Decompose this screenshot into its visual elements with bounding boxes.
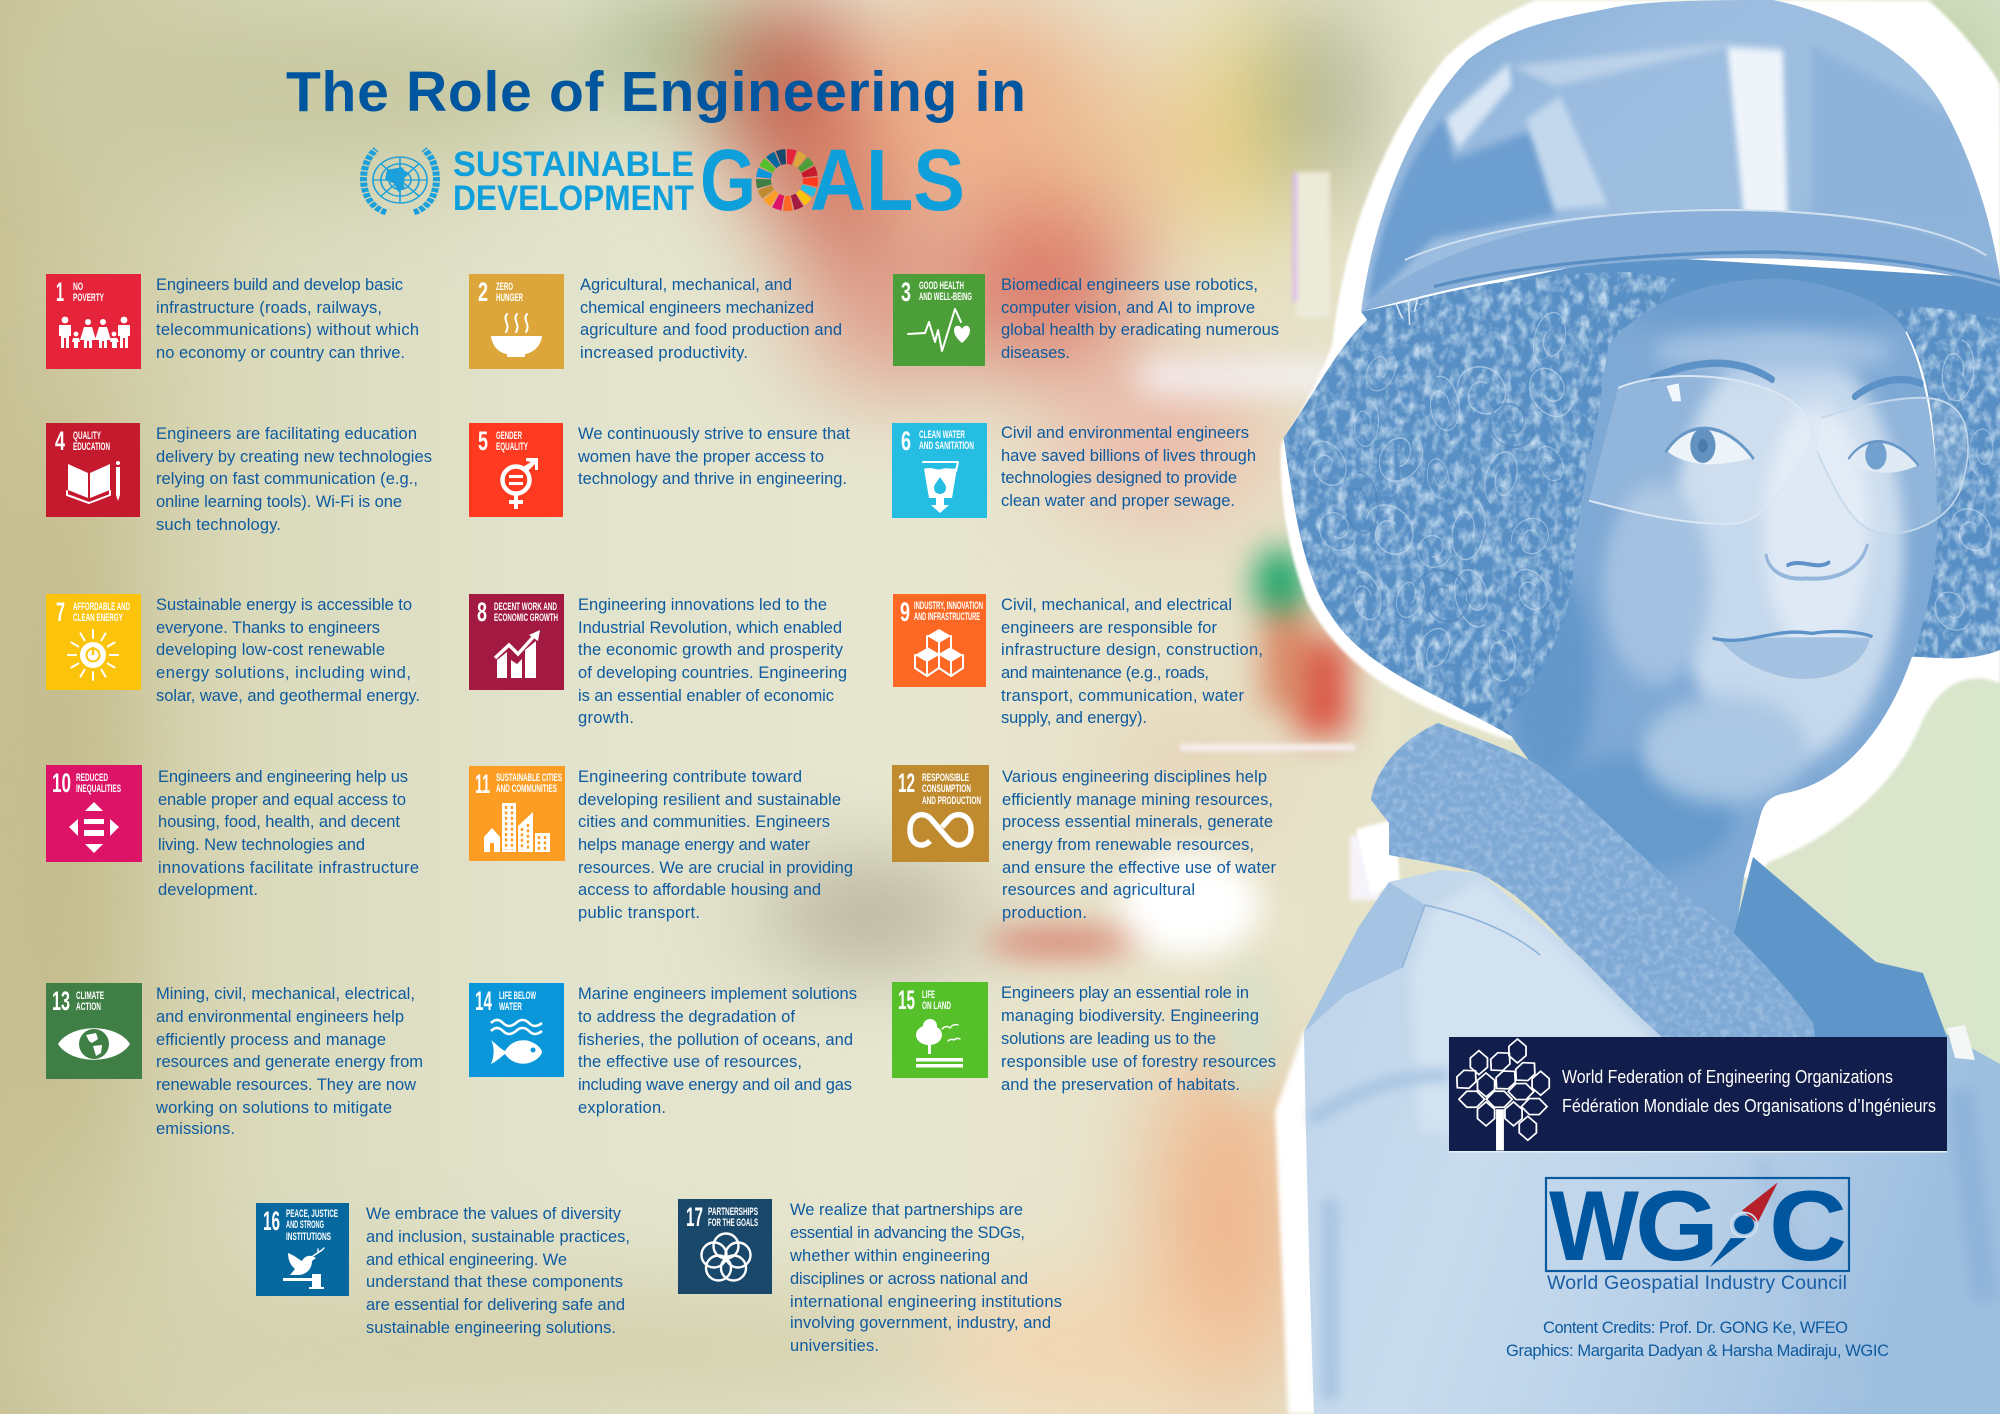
panel: goal 4 quality education [46, 423, 432, 534]
tile 6 [892, 423, 987, 518]
text 13 [155, 985, 423, 1138]
text 5: We continuously strive to ensure that [578, 425, 850, 443]
text 15 [1001, 984, 1276, 1094]
icon: waves and fish [491, 1020, 542, 1064]
text 15: Engineers play an essential role in [1001, 984, 1249, 1002]
text 11: public transport. [578, 904, 700, 922]
tile 11: SUSTAINABLE CITIES [496, 772, 562, 784]
text 11: developing resilient and sustainable [578, 791, 841, 809]
text 15: and the preservation of habitats. [1001, 1076, 1240, 1094]
text 4 [156, 425, 432, 534]
WGIC full name: World Geospatial Industry Council [1547, 1272, 1847, 1294]
shadow band under brim [1361, 255, 2000, 345]
wordmark letters: G [1635, 1170, 1719, 1281]
text 7: solar, wave, and geothermal energy. [156, 687, 420, 705]
text 11 [578, 768, 853, 922]
tile 17: PARTNERSHIPS [708, 1206, 758, 1218]
text 6: technologies designed to provide [1001, 469, 1237, 487]
text 11: cities and communities. Engineers [578, 813, 830, 831]
tile 12: CONSUMPTION [922, 783, 971, 795]
text 17: international engineering institutions [790, 1293, 1062, 1311]
icon: compass needle [1710, 1183, 1778, 1267]
tile 14 [469, 983, 564, 1077]
text 9: and maintenance (e.g., roads, [1001, 664, 1209, 682]
icon: UN emblem [364, 149, 436, 212]
wordmark letters: C [1769, 1170, 1847, 1281]
text 10: innovations facilitate infrastructure [158, 859, 419, 877]
text 8: the economic growth and prosperity [578, 641, 844, 659]
logo: WFEO [1449, 1037, 1947, 1152]
text 7 [156, 596, 420, 705]
text 16: sustainable engineering solutions. [366, 1319, 616, 1337]
panel: goal 6 clean water [892, 423, 1256, 518]
text 17: universities. [790, 1337, 879, 1355]
tile 14: LIFE BELOW [499, 990, 536, 1002]
tile 8: ECONOMIC GROWTH [494, 612, 558, 624]
text 5 [577, 425, 850, 488]
right collar [1733, 857, 1947, 1037]
tile 5 [469, 423, 563, 517]
face and neck [1502, 278, 1937, 933]
tile 13: 13 [52, 986, 70, 1016]
tile 1: 1 [56, 277, 64, 307]
icon: open book and pencil [67, 461, 120, 503]
panel: goal 17 partnerships [678, 1199, 1062, 1355]
tile 4: EDUCATION [73, 441, 110, 453]
icon: pulse and heart [908, 309, 970, 351]
text 9 [1001, 596, 1263, 727]
text 2: Agricultural, mechanical, and [580, 276, 792, 294]
tile 14: 14 [475, 986, 492, 1016]
text 1 [156, 276, 419, 362]
text 6: clean water and proper sewage. [1001, 492, 1235, 510]
text 12 [1002, 768, 1276, 922]
tile 10: INEQUALITIES [76, 783, 121, 795]
tile 7: 7 [56, 597, 65, 627]
tile 7 [46, 594, 141, 690]
text 9: infrastructure design, construction, [1001, 641, 1263, 659]
text 2: agriculture and food production and [580, 321, 842, 339]
text 13: and environmental engineers help [156, 1008, 404, 1026]
tile 9: 9 [900, 597, 910, 627]
text 11: access to affordable housing and [578, 881, 821, 899]
panel: goal 5 gender equality [469, 423, 850, 517]
text 1: no economy or country can thrive. [156, 344, 405, 362]
tile 16 [256, 1203, 349, 1296]
tile 3: GOOD HEALTH [919, 280, 964, 292]
text 4: delivery by creating new technologies [156, 448, 432, 466]
text 8: Engineering innovations led to the [578, 596, 827, 614]
text 12: Various engineering disciplines help [1002, 768, 1267, 786]
eyebrows, eyes, glasses, nose, mouth [1589, 363, 1968, 679]
tile 17: FOR THE GOALS [708, 1217, 758, 1229]
text 11: Engineering contribute toward [578, 768, 802, 786]
tile 4: 4 [55, 426, 65, 456]
text 16 [366, 1205, 630, 1337]
photo: engineer in hard hat [1275, 0, 2000, 1414]
text 11: resources. We are crucial in providing [578, 859, 853, 877]
tile 11: 11 [475, 769, 490, 799]
tile 11: AND COMMUNITIES [496, 783, 557, 795]
tile 14: WATER [499, 1001, 522, 1013]
tile 10: 10 [52, 768, 71, 798]
text 13: working on solutions to mitigate [155, 1099, 392, 1117]
text 7: Sustainable energy is accessible to [156, 596, 412, 614]
text 13: resources and generate energy from [156, 1053, 423, 1071]
tile 12: AND PRODUCTION [922, 795, 981, 807]
title: The Role of Engineering in [286, 60, 1026, 124]
tile 1: POVERTY [73, 292, 104, 304]
text 7: energy solutions, including wind, [156, 664, 411, 682]
tile 3: 3 [901, 277, 911, 307]
text 3: computer vision, and AI to improve [1001, 299, 1255, 317]
tile 11 [469, 766, 565, 861]
tile 9: AND INFRASTRUCTURE [914, 611, 980, 623]
text 8: is an essential enabler of economic [578, 687, 834, 705]
text 9: engineers are responsible for [1001, 619, 1218, 637]
text 10: living. New technologies and [158, 836, 365, 854]
text 6: Civil and environmental engineers [1001, 424, 1249, 442]
text 9: transport, communication, water [1001, 687, 1244, 705]
text 13: Mining, civil, mechanical, electrical, [156, 985, 415, 1003]
panel: goal 3 good health [893, 274, 1279, 366]
tile 3: AND WELL-BEING [919, 291, 972, 303]
text 12: process essential minerals, generate [1002, 813, 1273, 831]
text 10 [158, 768, 419, 899]
text 8: growth. [578, 709, 634, 727]
text 13: emissions. [156, 1120, 235, 1138]
tile 6: CLEAN WATER [919, 429, 965, 441]
tile 16: PEACE, JUSTICE [286, 1208, 338, 1220]
tile 1 [46, 274, 141, 369]
text 12: production. [1002, 904, 1087, 922]
icon: growth chart [495, 630, 540, 678]
WFEO name: Fédération Mondiale des Organisations d’Ingénieurs [1562, 1095, 1936, 1116]
text 14: fisheries, the pollution of oceans, and [578, 1031, 853, 1049]
text 3: Biomedical engineers use robotics, [1001, 276, 1258, 294]
icon: bowl [491, 314, 542, 357]
icon: WFEO tree [1451, 1039, 1549, 1151]
tile 6: AND SANITATION [919, 440, 974, 452]
tile 8: 8 [477, 597, 487, 627]
text 10: Engineers and engineering help us [158, 768, 408, 786]
icon: five rings [702, 1234, 750, 1280]
wordmark letters [1549, 1170, 1847, 1281]
text 12: efficiently manage mining resources, [1002, 791, 1273, 809]
tile 2 [469, 274, 564, 369]
icon: gender symbol [502, 458, 538, 509]
tile 7: AFFORDABLE AND [73, 601, 130, 613]
text 3 [1001, 276, 1279, 362]
wordmark: sustainable development: SUSTAINABLE [453, 145, 694, 184]
icon: dove and gavel [283, 1248, 324, 1289]
text 17: We realize that partnerships are [790, 1201, 1023, 1219]
wordmark: sustainable development [453, 145, 694, 218]
text 2 [580, 276, 842, 362]
tile 12: 12 [898, 768, 915, 798]
logo: Sustainable Development Goals [364, 132, 965, 229]
wordmark: sustainable development: DEVELOPMENT [453, 179, 694, 218]
wordmark letters: W [1549, 1170, 1640, 1281]
credits: Graphics: Margarita Dadyan & Harsha Madiraju, WGIC [1506, 1342, 1889, 1360]
tile 2: ZERO [496, 281, 513, 293]
text 16: are essential for delivering safe and [366, 1296, 625, 1314]
tile 10: REDUCED [76, 772, 108, 784]
panel: goal 7 clean energy [46, 594, 420, 705]
tile 16: 16 [263, 1206, 280, 1236]
text 12: and ensure the effective use of water [1002, 859, 1276, 877]
text 13: renewable resources. They are now [156, 1076, 416, 1094]
hair [1284, 244, 2000, 736]
text 6: have saved billions of lives through [1001, 447, 1256, 465]
text 16: We embrace the values of diversity [366, 1205, 622, 1223]
text 16: understand that these components [366, 1273, 623, 1291]
text 13: efficiently process and manage [156, 1031, 386, 1049]
tile 15 [892, 982, 988, 1078]
text 12: resources and agricultural [1002, 881, 1195, 899]
panel: goal 14 life below water [469, 983, 857, 1117]
tile 13 [46, 983, 142, 1079]
icon: arrows and equals [69, 802, 119, 853]
icon: SDG colour wheel [754, 147, 820, 213]
text 17 [789, 1201, 1062, 1355]
icon: sun [68, 630, 118, 680]
icon: eye with globe [58, 1028, 130, 1060]
icon: city [484, 803, 550, 852]
panel: goal 11 sustainable cities [469, 766, 853, 922]
tile 17 [678, 1199, 772, 1294]
panel: goal 9 industry [893, 594, 1263, 727]
text 16: and inclusion, sustainable practices, [366, 1228, 630, 1246]
wordmark: ALS: ALS [810, 132, 965, 229]
text 6 [1001, 424, 1256, 510]
tile 13: CLIMATE [76, 990, 104, 1002]
text 14 [578, 985, 857, 1117]
tile 8: DECENT WORK AND [494, 601, 557, 613]
text 10: enable proper and equal access to [158, 791, 406, 809]
text 8 [578, 596, 847, 727]
tile 9: INDUSTRY, INNOVATION [914, 600, 983, 612]
text 7: everyone. Thanks to engineers [156, 619, 380, 637]
text 4: relying on fast communication (e.g., [156, 470, 418, 488]
jacket [1275, 870, 2000, 1414]
text 14: Marine engineers implement solutions [578, 985, 857, 1003]
text 15: solutions are leading us to the [1001, 1030, 1216, 1048]
text 11: helps manage energy and water [578, 836, 810, 854]
text 17: disciplines or across national and [790, 1270, 1028, 1288]
text 1: Engineers build and develop basic [156, 276, 403, 294]
text 1: infrastructure (roads, railways, [156, 299, 382, 317]
text 17: involving government, industry, and [790, 1314, 1051, 1332]
text 14: exploration. [578, 1099, 666, 1117]
text 9: Civil, mechanical, and electrical [1001, 596, 1232, 614]
wordmark: G: G [700, 132, 756, 229]
fleece collar [1371, 723, 1815, 1037]
panel: goal 15 life on land [892, 982, 1276, 1094]
text 14: the effective use of resources, [578, 1053, 802, 1071]
icon: infinity loop [910, 815, 971, 845]
text 8: Industrial Revolution, which enabled [578, 619, 842, 637]
icon: cubes [915, 629, 963, 676]
text 10: housing, food, health, and decent [158, 813, 400, 831]
tile 15: LIFE [922, 989, 935, 1001]
panel: goal 16 peace justice [256, 1203, 630, 1337]
tile 4 [46, 423, 140, 517]
logo: WGIC [1546, 1170, 1849, 1294]
tile 3 [893, 274, 985, 366]
icon: water glass [923, 462, 958, 513]
text 5: women have the proper access to [577, 448, 824, 466]
text 4: such technology. [156, 516, 281, 534]
text 14: including wave energy and oil and gas [578, 1076, 852, 1094]
text 16: and ethical engineering. We [366, 1251, 567, 1269]
white halo around the figure [1281, 0, 2000, 895]
tile 15: ON LAND [922, 1000, 951, 1012]
text 2: chemical engineers mechanized [580, 299, 814, 317]
tile 6: 6 [901, 426, 911, 456]
tile 5: EQUALITY [496, 441, 528, 453]
tile 7: CLEAN ENERGY [73, 612, 123, 624]
tile 8 [469, 594, 564, 690]
text 5: technology and thrive in engineering. [578, 470, 847, 488]
text 3: global health by eradicating numerous [1001, 321, 1279, 339]
tile 5: GENDER [496, 430, 522, 442]
tile 5: 5 [478, 426, 488, 456]
text 2: increased productivity. [580, 344, 748, 362]
credits [1506, 1319, 1889, 1360]
text 17: essential in advancing the SDGs, [790, 1224, 1025, 1242]
text 1: telecommunications) without which [156, 321, 419, 339]
tile 2: HUNGER [496, 292, 523, 304]
WFEO name: World Federation of Engineering Organizations [1562, 1066, 1893, 1087]
hat [1356, 0, 2000, 318]
tile 12: RESPONSIBLE [922, 772, 969, 784]
text 4: online learning tools). Wi-Fi is one [156, 493, 402, 511]
text 14: to address the degradation of [578, 1008, 795, 1026]
text 15: managing biodiversity. Engineering [1001, 1007, 1259, 1025]
text 4: Engineers are facilitating education [156, 425, 417, 443]
icon: family [59, 317, 130, 348]
panel: goal 13 climate action [46, 983, 423, 1138]
icon: tree and birds [916, 1019, 963, 1068]
tile 4: QUALITY [73, 430, 101, 442]
text 15: responsible use of forestry resources [1001, 1053, 1276, 1071]
tile 13: ACTION [76, 1001, 101, 1013]
text 12: energy from renewable resources, [1002, 836, 1254, 854]
tile 16: INSTITUTIONS [286, 1231, 331, 1243]
tile 10 [46, 765, 142, 862]
panel: goal 1 no poverty [46, 274, 419, 369]
tile 15: 15 [898, 985, 915, 1015]
text 9: supply, and energy). [1001, 709, 1147, 727]
panel: goal 10 reduced inequalities [46, 765, 419, 899]
WFEO name [1562, 1066, 1936, 1116]
tile 17: 17 [686, 1202, 703, 1232]
text 17: whether within engineering [789, 1247, 990, 1265]
head: hat, hair and face [1281, 0, 2000, 962]
text 10: development. [158, 881, 258, 899]
panel: goal 8 decent work [469, 594, 847, 727]
tile 16: AND STRONG [286, 1219, 324, 1231]
text 7: developing low-cost renewable [156, 641, 385, 659]
text 8: of developing countries. Engineering [578, 664, 847, 682]
tile 9 [893, 594, 986, 687]
tile 1: NO [73, 281, 83, 293]
text 3: diseases. [1001, 344, 1070, 362]
tile 2: 2 [478, 277, 488, 307]
panel: goal 12 responsible consumption [892, 765, 1276, 922]
panel: goal 2 zero hunger [469, 274, 842, 369]
credits: Content Credits: Prof. Dr. GONG Ke, WFEO [1543, 1319, 1848, 1337]
tile 12 [892, 765, 989, 862]
